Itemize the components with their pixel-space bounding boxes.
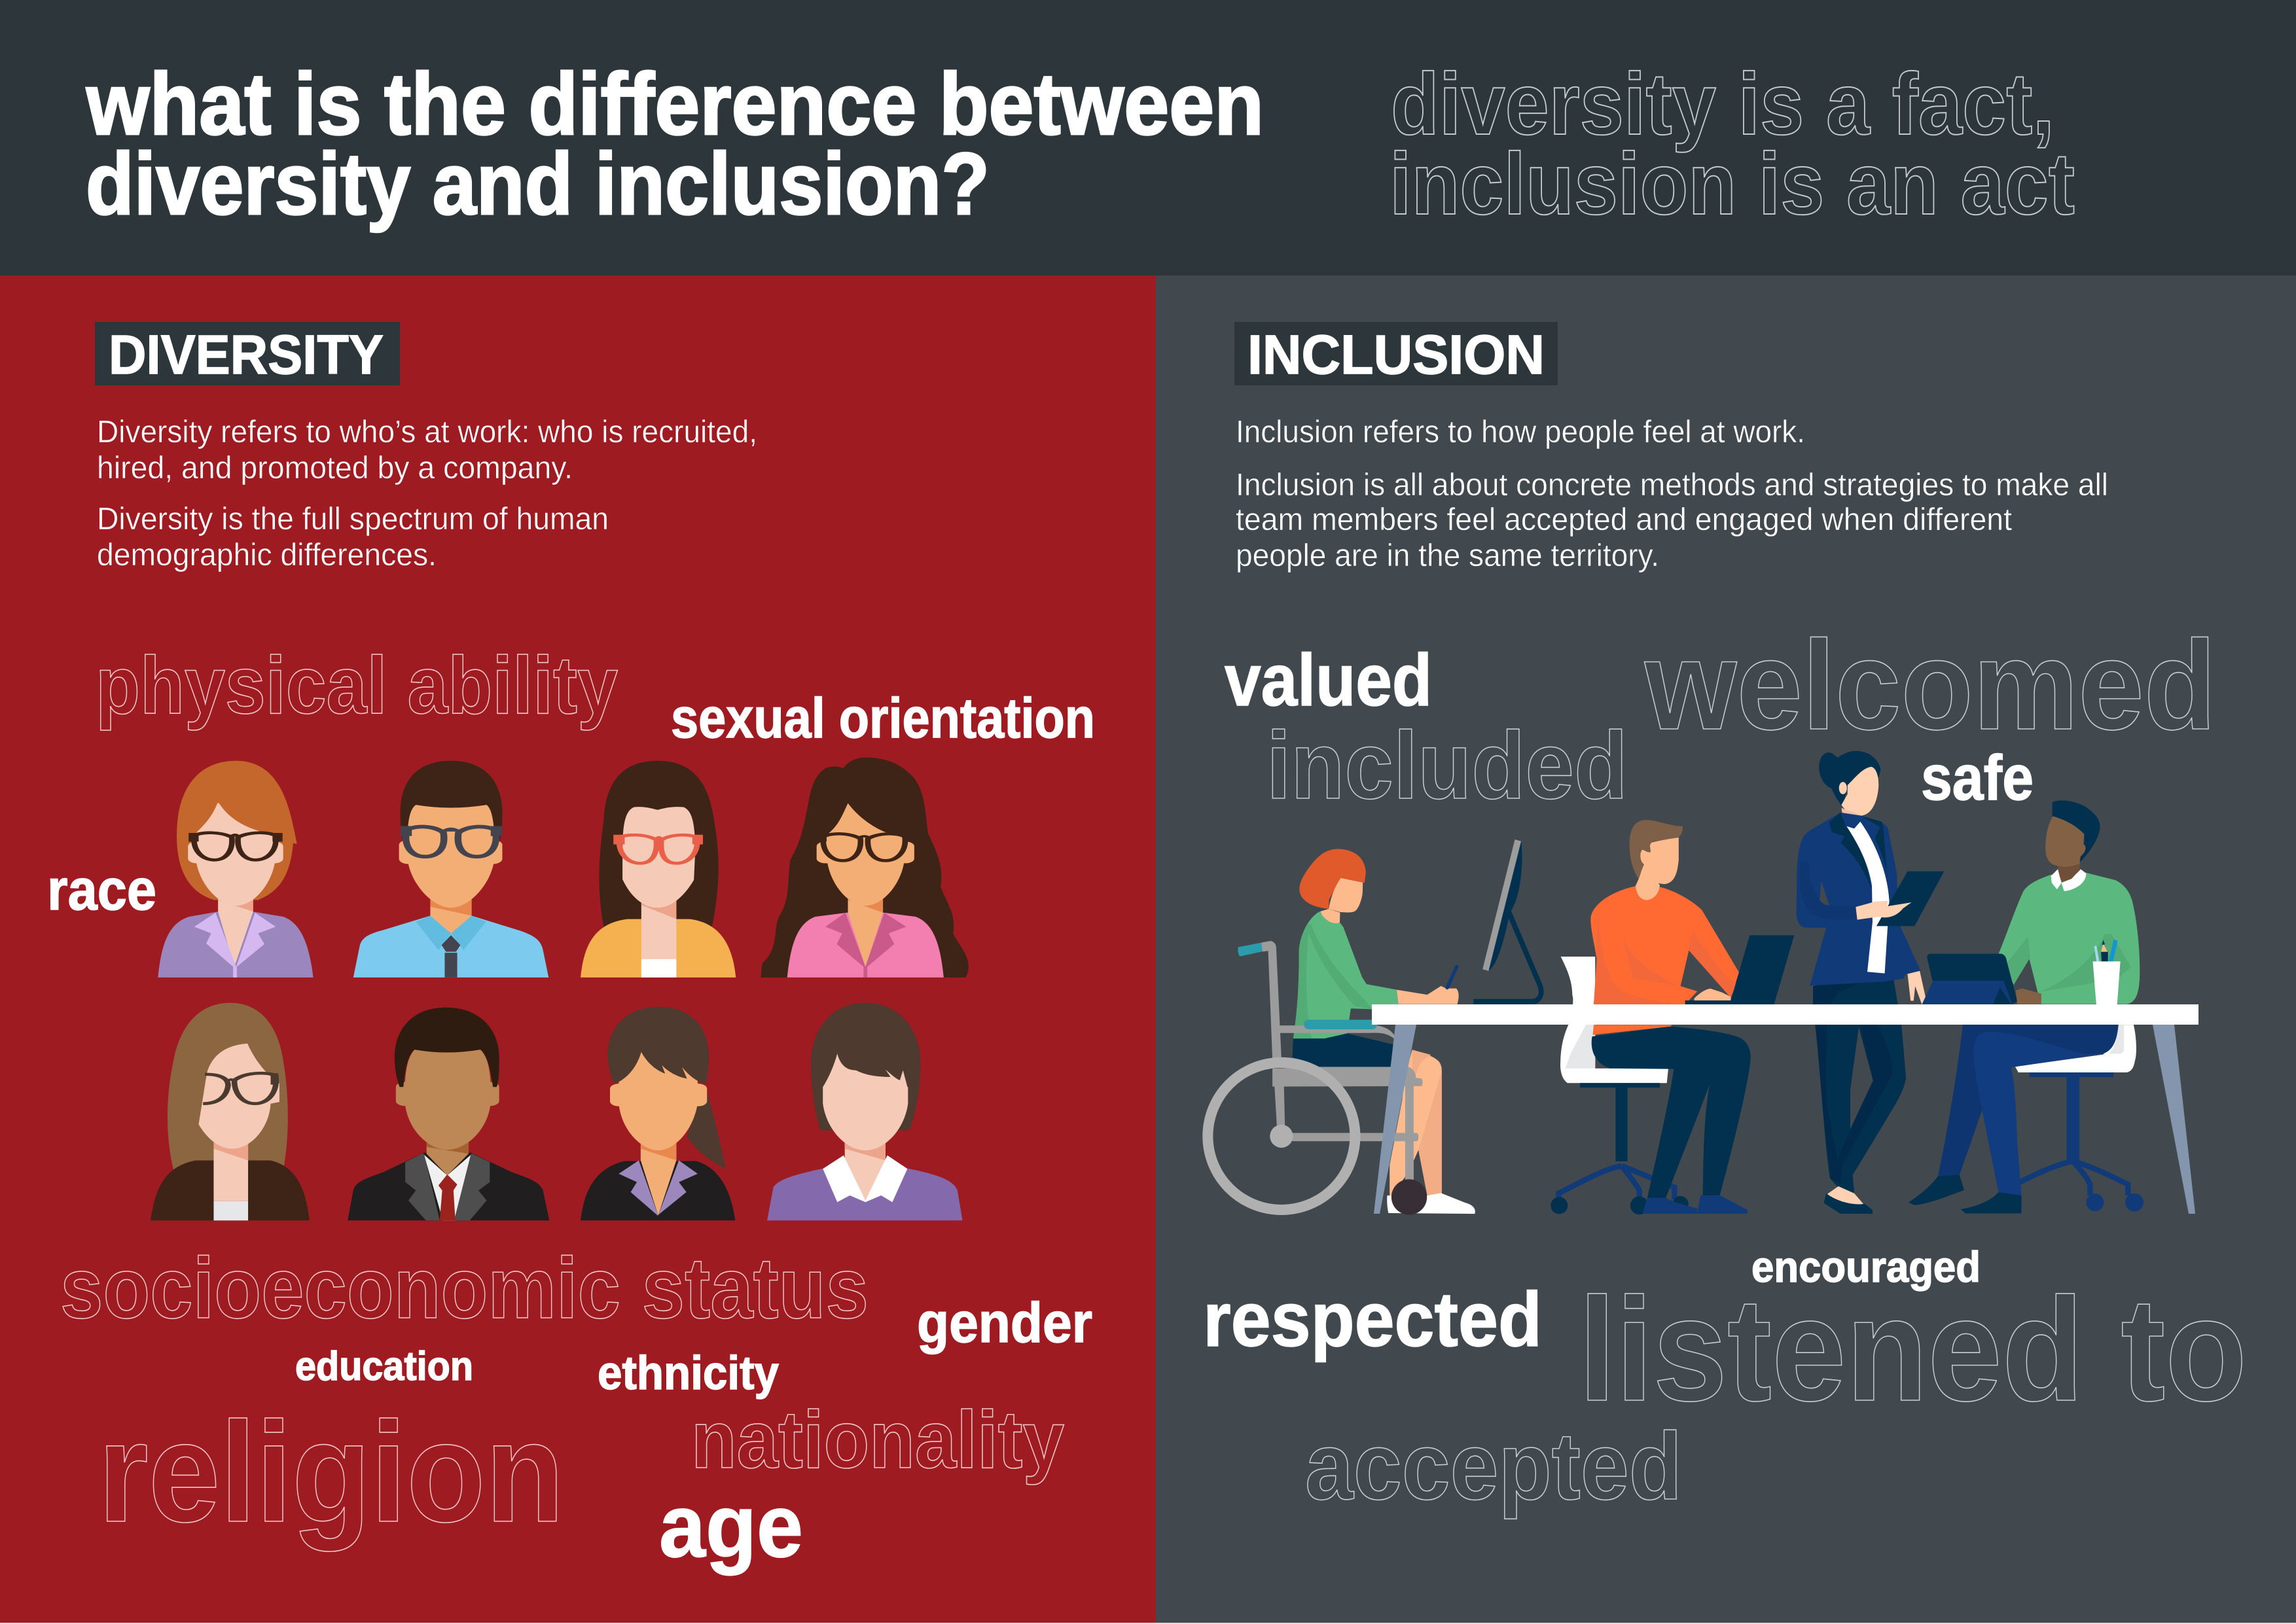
standing woman with tablet xyxy=(1797,751,1944,1214)
portrait: woman with long brown hair xyxy=(151,1003,310,1220)
man in green sweater on chair xyxy=(1909,800,2144,1213)
portrait: woman with ponytail xyxy=(581,1007,735,1220)
illustration: team at a table xyxy=(1208,751,2198,1215)
portrait: woman in purple sweater xyxy=(767,1003,963,1220)
text: diversity definition: Diversity is the full spectrum of human xyxy=(97,502,609,537)
word cloud: diversity dimensions xyxy=(47,641,1095,1576)
title: what is the difference between xyxy=(86,56,1264,153)
text: inclusion definition: Inclusion refers to how people feel at work. xyxy=(1236,415,1805,450)
title xyxy=(86,56,1264,233)
word cloud: diversity dimensions: race xyxy=(47,857,156,922)
portrait: man in blue shirt xyxy=(353,761,548,978)
panel: diversity xyxy=(0,275,1156,1624)
portrait: woman in lilac blazer xyxy=(158,761,314,978)
word cloud: diversity dimensions: gender xyxy=(917,1292,1092,1354)
wheelchair user with monitor xyxy=(1208,839,1544,1215)
word cloud: inclusion feelings xyxy=(1203,614,2247,1519)
tagline: outlined xyxy=(1390,56,2075,233)
word cloud: inclusion feelings: accepted xyxy=(1305,1413,1682,1519)
word cloud: inclusion feelings: welcomed xyxy=(1644,614,2216,756)
text: diversity definition: demographic differences. xyxy=(97,538,437,573)
word cloud: inclusion feelings: encouraged xyxy=(1751,1243,1981,1291)
word cloud: inclusion feelings: respected xyxy=(1203,1277,1542,1363)
heading: inclusion: INCLUSION xyxy=(1247,324,1545,385)
tagline: outlined: inclusion is an act xyxy=(1390,135,2075,233)
text: inclusion definition xyxy=(1236,415,2108,573)
tagline: outlined: diversity is a fact, xyxy=(1391,56,2054,153)
title: diversity and inclusion? xyxy=(86,135,990,233)
text: diversity definition xyxy=(97,415,757,573)
word cloud: inclusion feelings: included xyxy=(1266,712,1628,819)
portrait: woman in yellow cardigan xyxy=(581,761,736,978)
heading: diversity: DIVERSITY xyxy=(109,324,384,385)
word cloud: inclusion feelings: safe xyxy=(1921,742,2034,813)
word cloud: inclusion feelings: valued xyxy=(1225,639,1432,721)
word cloud: diversity dimensions: sexual orientation xyxy=(671,687,1095,750)
panel: inclusion xyxy=(1156,275,2296,1624)
word cloud: diversity dimensions: age xyxy=(659,1476,803,1576)
word cloud: diversity dimensions: physical ability xyxy=(96,641,618,731)
portrait: woman in pink blazer xyxy=(761,758,969,978)
word cloud: diversity dimensions: socioeconomic status xyxy=(60,1240,869,1336)
text: inclusion definition: team members feel accepted and engaged when different xyxy=(1236,503,2012,537)
illustration: portraits grid xyxy=(151,758,969,1220)
text: diversity definition: hired, and promoted by a company. xyxy=(97,451,573,485)
table xyxy=(1372,1004,2198,1214)
header band xyxy=(0,0,2296,275)
word cloud: diversity dimensions: ethnicity xyxy=(598,1347,779,1400)
word cloud: diversity dimensions: nationality xyxy=(691,1395,1064,1485)
word cloud: diversity dimensions: religion xyxy=(98,1393,564,1552)
portrait: man in dark suit xyxy=(348,1008,549,1220)
man in orange sweater on chair xyxy=(1551,820,1794,1214)
word cloud: diversity dimensions: education xyxy=(295,1344,473,1389)
text: diversity definition: Diversity refers to who’s at work: who is recruited, xyxy=(97,415,757,450)
text: inclusion definition: people are in the same territory. xyxy=(1236,538,1659,573)
word cloud: inclusion feelings: listened to xyxy=(1579,1267,2247,1432)
text: inclusion definition: Inclusion is all about concrete methods and strategies to make all xyxy=(1236,468,2108,503)
